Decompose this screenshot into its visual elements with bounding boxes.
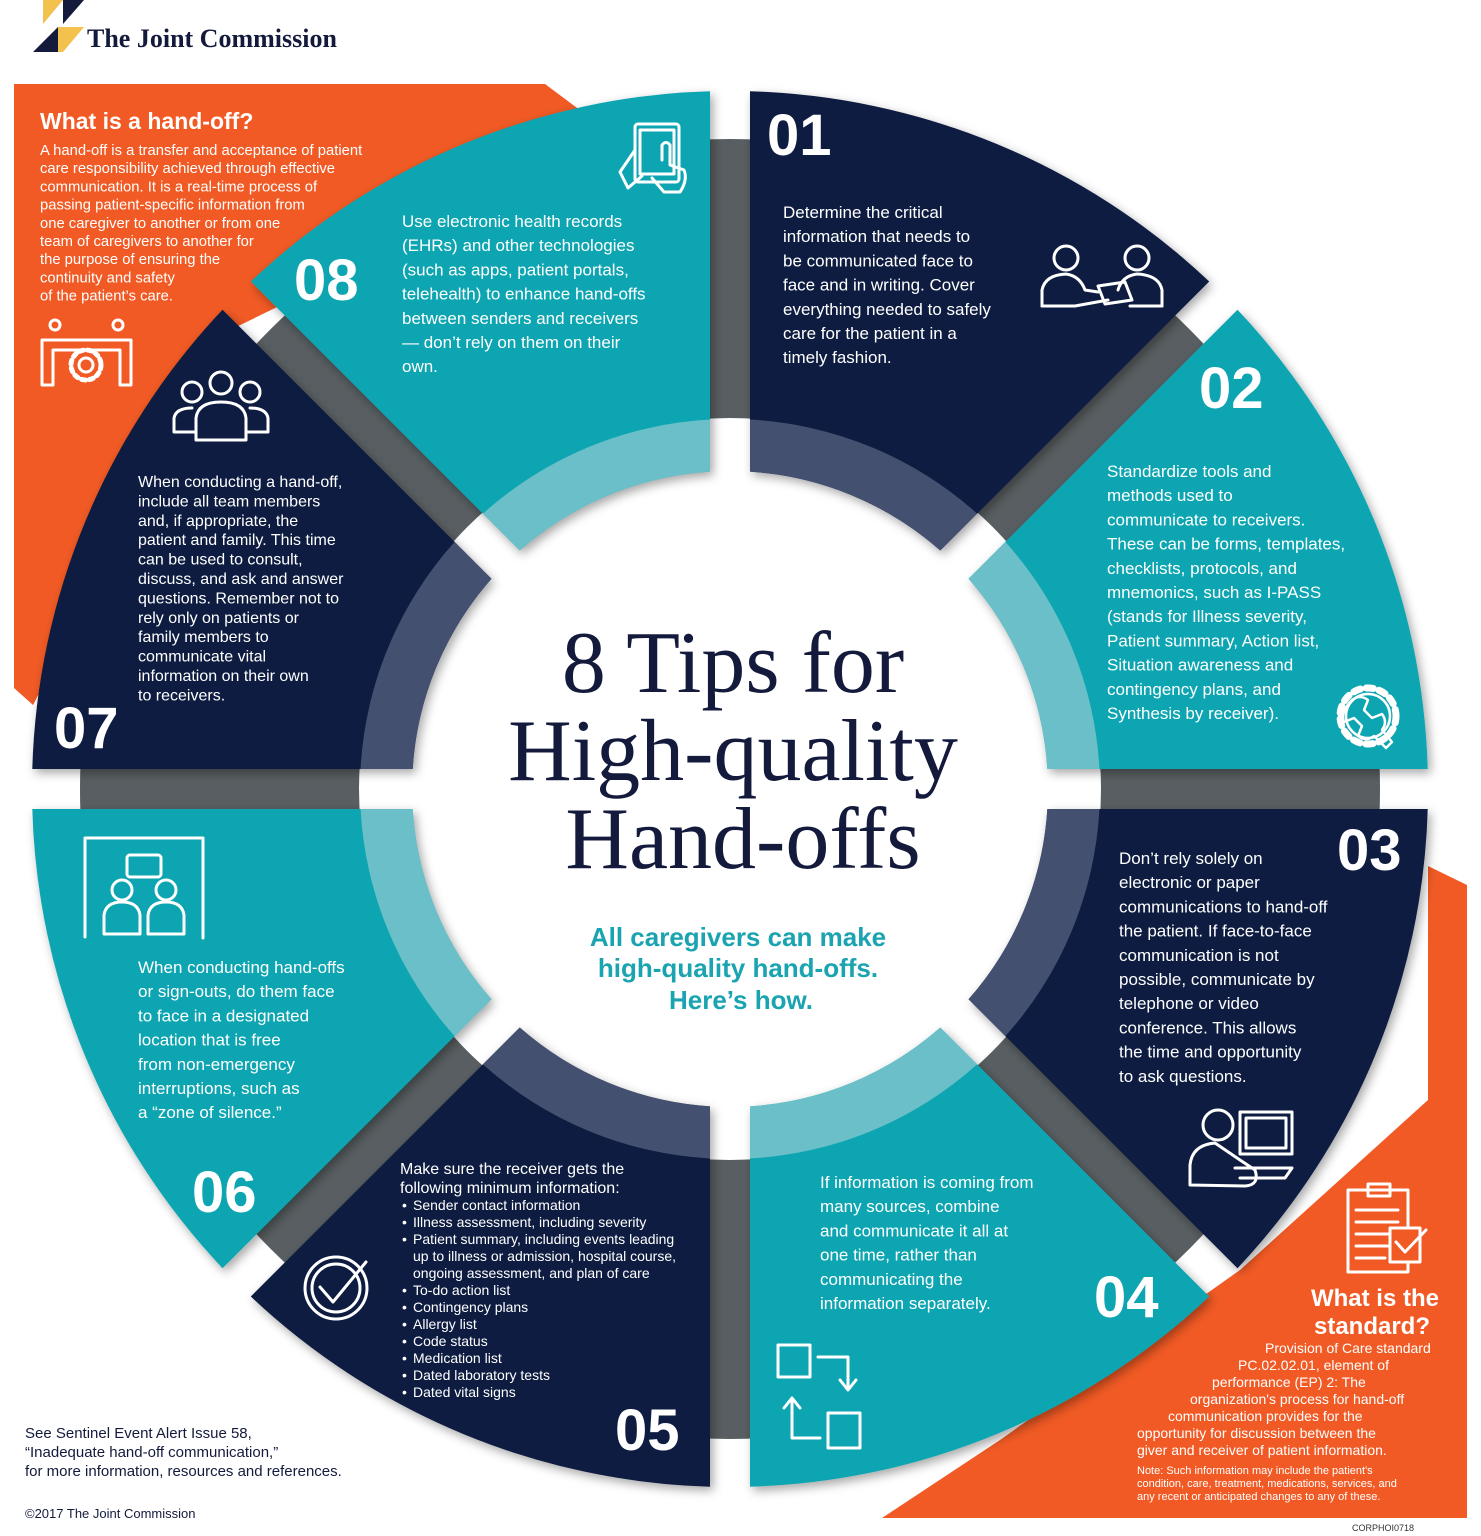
panel 03: to ask questions. bbox=[1119, 1067, 1247, 1086]
panel 02 bbox=[969, 310, 1428, 769]
text block: what is the standard: performance (EP) 2: The bbox=[1212, 1374, 1366, 1390]
panel 06: to face in a designated bbox=[138, 1006, 309, 1025]
panel 07: When conducting a hand-off, bbox=[138, 474, 342, 491]
panel 05: Dated vital signs bbox=[413, 1384, 516, 1400]
panel 04: communicating the bbox=[820, 1270, 963, 1289]
copyright: ©2017 The Joint Commission bbox=[25, 1506, 195, 1521]
panel 02: contingency plans, and bbox=[1107, 680, 1281, 699]
text block: what is a hand-off: the purpose of ensuring the bbox=[40, 252, 220, 268]
panel 08: — don’t rely on them on their bbox=[402, 333, 621, 352]
panel 01: be communicated face to bbox=[783, 251, 973, 270]
panel 05: • bbox=[402, 1316, 407, 1332]
panel 05: • bbox=[402, 1367, 407, 1383]
panel 05: Make sure the receiver gets the bbox=[400, 1161, 624, 1178]
panel 02: Synthesis by receiver). bbox=[1107, 704, 1279, 723]
text block: what is the standard: standard? bbox=[1314, 1313, 1430, 1340]
panel 06: 06 bbox=[192, 1160, 257, 1225]
panel 01 bbox=[750, 91, 1209, 550]
panel 07: questions. Remember not to bbox=[138, 590, 339, 607]
orange panel: what is the standard (background) bbox=[882, 866, 1467, 1518]
panel 05: • bbox=[402, 1282, 407, 1298]
panel 05: To-do action list bbox=[413, 1282, 510, 1298]
text block: what is a hand-off bbox=[40, 108, 362, 305]
panel 02: 02 bbox=[1199, 356, 1264, 421]
panel 07: can be used to consult, bbox=[138, 552, 303, 569]
text block: what is the standard: communication provides for the bbox=[1168, 1408, 1363, 1424]
text block: what is the standard: any recent or anticipated changes to any of these. bbox=[1137, 1491, 1380, 1503]
panel 04: If information is coming from bbox=[820, 1173, 1034, 1192]
panel 01: information that needs to bbox=[783, 227, 970, 246]
panel 03: communications to hand-off bbox=[1119, 897, 1328, 916]
panel 05: • bbox=[402, 1214, 407, 1230]
title: High-quality bbox=[508, 703, 958, 800]
text block: what is a hand-off: one caregiver to another or from one bbox=[40, 216, 280, 232]
icon: people holding gear bbox=[42, 320, 131, 385]
panel 05: • bbox=[402, 1197, 407, 1213]
title: Hand-offs bbox=[565, 791, 921, 888]
panel 08: telehealth) to enhance hand-offs bbox=[402, 285, 646, 304]
panel 05: • bbox=[402, 1350, 407, 1366]
panel 01: everything needed to safely bbox=[783, 300, 991, 319]
subtitle: high-quality hand-offs. bbox=[598, 953, 878, 983]
text block: what is a hand-off: A hand-off is a transfer and acceptance of patient bbox=[40, 143, 362, 159]
panel 04 bbox=[750, 1028, 1209, 1487]
panel 06: location that is free bbox=[138, 1031, 281, 1050]
text block: what is the standard: condition, care, treatment, medications, services, and bbox=[1137, 1478, 1397, 1490]
panel 03: telephone or video bbox=[1119, 994, 1259, 1013]
text block: what is a hand-off: team of caregivers to another for bbox=[40, 234, 254, 250]
text block: what is the standard: What is the bbox=[1311, 1285, 1439, 1312]
panel 07 bbox=[32, 310, 491, 769]
subtitle: All caregivers can make bbox=[590, 922, 886, 952]
panel 07: include all team members bbox=[138, 493, 320, 510]
icon: tablet bbox=[620, 124, 685, 192]
panel 08 bbox=[251, 91, 710, 550]
panel 03: the time and opportunity bbox=[1119, 1043, 1302, 1062]
panel 08: between senders and receivers bbox=[402, 309, 638, 328]
panel 01: face and in writing. Cover bbox=[783, 276, 975, 295]
text block: what is a hand-off: communication. It is a real-time process of bbox=[40, 179, 318, 195]
panel 01: care for the patient in a bbox=[783, 324, 957, 343]
icon: team bbox=[174, 372, 268, 440]
panel 02: These can be forms, templates, bbox=[1107, 535, 1345, 554]
panel 01: Determine the critical bbox=[783, 203, 943, 222]
panel 07: and, if appropriate, the bbox=[138, 513, 298, 530]
icon: check circle bbox=[305, 1257, 367, 1319]
panel 07: patient and family. This time bbox=[138, 532, 336, 549]
panel 08: (such as apps, patient portals, bbox=[402, 260, 629, 279]
panel 03: communication is not bbox=[1119, 946, 1279, 965]
icon: person at computer bbox=[1190, 1110, 1292, 1186]
panel 02: Patient summary, Action list, bbox=[1107, 631, 1319, 650]
panel 05: Code status bbox=[413, 1333, 488, 1349]
title: 8 Tips for bbox=[562, 615, 904, 712]
icon: exchange arrows bbox=[778, 1345, 860, 1448]
white center bbox=[359, 418, 1101, 1160]
panel 05: Allergy list bbox=[413, 1316, 477, 1332]
panel 02: checklists, protocols, and bbox=[1107, 559, 1297, 578]
panel 05: Sender contact information bbox=[413, 1197, 580, 1213]
panel 05: following minimum information: bbox=[400, 1180, 620, 1197]
panel 02: mnemonics, such as I-PASS bbox=[1107, 583, 1321, 602]
text block: what is the standard bbox=[1137, 1285, 1439, 1503]
footnote: sentinel alert: for more information, resources and references. bbox=[25, 1463, 342, 1480]
panel 07: information on their own bbox=[138, 668, 309, 685]
panel 05: Illness assessment, including severity bbox=[413, 1214, 646, 1230]
panel 05: ongoing assessment, and plan of care bbox=[413, 1265, 650, 1281]
text block: what is the standard: PC.02.02.01, element of bbox=[1238, 1357, 1389, 1373]
panel 03: conference. This allows bbox=[1119, 1018, 1296, 1037]
icon: two people with tablet bbox=[1042, 246, 1162, 306]
panel 02: Situation awareness and bbox=[1107, 656, 1293, 675]
panel 03: Don’t rely solely on bbox=[1119, 849, 1263, 868]
panel 04: and communicate it all at bbox=[820, 1221, 1008, 1240]
panel 03: the patient. If face-to-face bbox=[1119, 922, 1312, 941]
panel 06: a “zone of silence.” bbox=[138, 1103, 282, 1122]
panel 02: communicate to receivers. bbox=[1107, 510, 1305, 529]
panel 05: • bbox=[402, 1231, 407, 1247]
panel 08: (EHRs) and other technologies bbox=[402, 236, 634, 255]
panel 02: (stands for Illness severity, bbox=[1107, 607, 1307, 626]
text block: what is a hand-off: What is a hand-off? bbox=[40, 108, 253, 134]
footnote: sentinel alert: “Inadequate hand-off communication,” bbox=[25, 1444, 278, 1461]
panel 08: Use electronic health records bbox=[402, 212, 622, 231]
panel 01: 01 bbox=[767, 103, 832, 168]
panel 05: Dated laboratory tests bbox=[413, 1367, 550, 1383]
panel 05: • bbox=[402, 1333, 407, 1349]
panel 03 bbox=[969, 809, 1428, 1268]
panel 07: 07 bbox=[54, 696, 119, 761]
text block: what is the standard: Provision of Care standard bbox=[1265, 1340, 1431, 1356]
panel 06: or sign-outs, do them face bbox=[138, 982, 335, 1001]
footnote: sentinel alert bbox=[25, 1425, 342, 1480]
text block: what is a hand-off: passing patient-specific information from bbox=[40, 198, 305, 214]
panel 05 bbox=[251, 1028, 710, 1487]
panel 03: electronic or paper bbox=[1119, 873, 1260, 892]
panel 06: from non-emergency bbox=[138, 1055, 295, 1074]
text block: what is a hand-off: continuity and safety bbox=[40, 270, 176, 286]
panel 05: • bbox=[402, 1299, 407, 1315]
panel 05: up to illness or admission, hospital course, bbox=[413, 1248, 676, 1264]
subtitle: Here’s how. bbox=[669, 985, 813, 1015]
footnote: sentinel alert: See Sentinel Event Alert Issue 58, bbox=[25, 1425, 252, 1442]
panel 07: rely only on patients or bbox=[138, 610, 300, 627]
panel 08: 08 bbox=[294, 248, 359, 313]
subtitle bbox=[590, 922, 886, 1015]
panel 07: family members to bbox=[138, 629, 269, 646]
orange panel: what is a hand-off (background) bbox=[14, 84, 620, 705]
panel 02: methods used to bbox=[1107, 486, 1233, 505]
panel 03: possible, communicate by bbox=[1119, 970, 1315, 989]
gray ring bbox=[220, 279, 1240, 1299]
icon: gear and wrench bbox=[1340, 688, 1396, 748]
panel 05: • bbox=[402, 1384, 407, 1400]
text block: what is the standard: opportunity for discussion between the bbox=[1137, 1425, 1376, 1441]
panel 05: Contingency plans bbox=[413, 1299, 528, 1315]
title bbox=[508, 615, 958, 888]
panel 04: 04 bbox=[1094, 1265, 1159, 1330]
panel 06: interruptions, such as bbox=[138, 1079, 300, 1098]
logo: The Joint Commission bbox=[87, 24, 337, 53]
panel 06: When conducting hand-offs bbox=[138, 958, 345, 977]
panel 02: Standardize tools and bbox=[1107, 462, 1271, 481]
panel 06 bbox=[32, 809, 491, 1268]
text block: what is the standard: giver and receiver of patient information. bbox=[1137, 1442, 1387, 1458]
panel 04: one time, rather than bbox=[820, 1246, 977, 1265]
panel 08: own. bbox=[402, 357, 438, 376]
panel 05: 05 bbox=[615, 1398, 680, 1463]
panel 04: many sources, combine bbox=[820, 1197, 1000, 1216]
code: CORPHOI0718 bbox=[1352, 1523, 1414, 1533]
text block: what is the standard: organization's process for hand-off bbox=[1190, 1391, 1404, 1407]
panel 05: Patient summary, including events leading bbox=[413, 1231, 674, 1247]
panel 03: 03 bbox=[1337, 818, 1402, 883]
logo bbox=[33, 0, 337, 53]
panel 07: to receivers. bbox=[138, 687, 225, 704]
panel 07: discuss, and ask and answer bbox=[138, 571, 344, 588]
icon: meeting room bbox=[85, 838, 203, 938]
panel 04: information separately. bbox=[820, 1294, 991, 1313]
panel 07: communicate vital bbox=[138, 649, 266, 666]
icon: clipboard bbox=[1348, 1184, 1426, 1272]
panel 05: Medication list bbox=[413, 1350, 502, 1366]
text block: what is a hand-off: care responsibility achieved through effective bbox=[40, 161, 335, 177]
panel 01: timely fashion. bbox=[783, 348, 892, 367]
text block: what is a hand-off: of the patient’s care. bbox=[40, 289, 173, 305]
text block: what is the standard: Note: Such information may include the patient's bbox=[1137, 1465, 1373, 1477]
